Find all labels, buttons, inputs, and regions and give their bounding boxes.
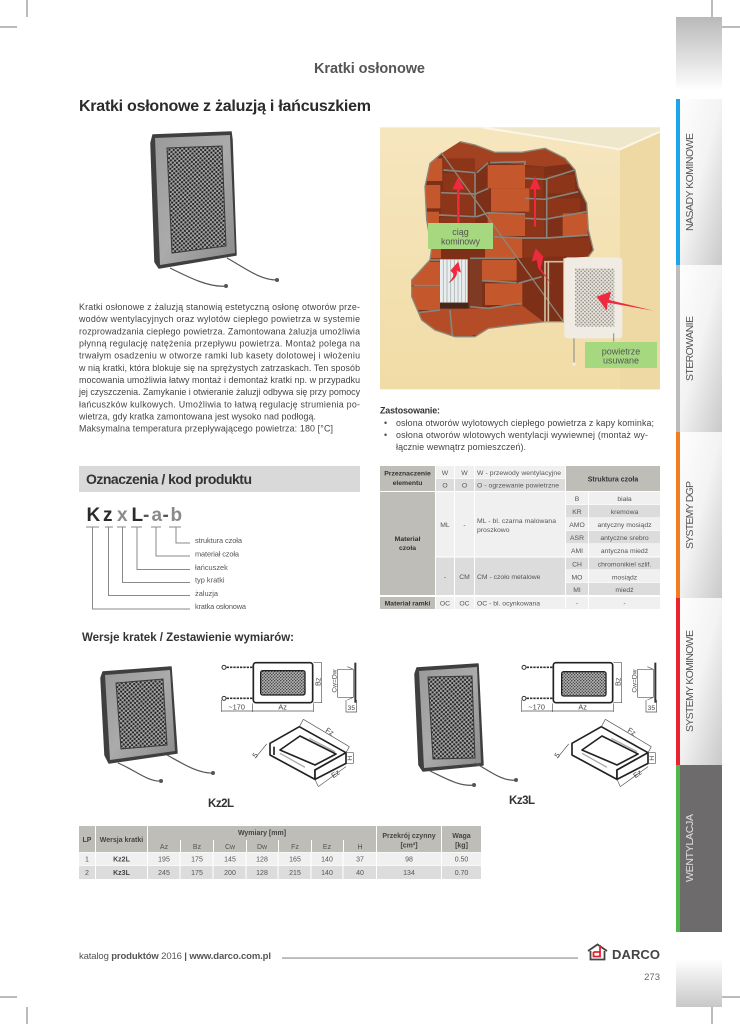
table: materials and finishes: Materiał ramki	[385, 600, 430, 608]
table: dimensions: 128	[256, 870, 268, 877]
heading: product code: Oznaczenia / kod produktu	[86, 471, 252, 487]
table: materials and finishes: chromonikiel szlif.	[598, 562, 651, 568]
table: dimensions: Wersja kratki	[100, 837, 143, 844]
table: dimensions: 134	[403, 870, 415, 877]
table: dimensions: Dw	[257, 844, 268, 851]
table: materials and finishes: elementu	[393, 480, 422, 487]
page number: 273	[644, 972, 660, 983]
description paragraph: w nią kratki, która blokuje się na sprężystych zatrzaskach. Ten sposób	[78, 363, 360, 373]
code labels	[195, 536, 247, 611]
application list: łącznie wewnątrz pomieszczeń).	[396, 442, 526, 452]
table: dimensions: 195	[158, 856, 170, 864]
technical drawing: Kz3L: Cw=Dw	[632, 669, 639, 693]
label: Kz2L: Kz2L	[208, 798, 234, 810]
application list: osłona otworów wlotowych wentylacji wywiewnej (montaż wy-	[396, 430, 648, 440]
description paragraph: rozprowadzania ciepłego powietrza. Zamontowana żaluzja umożliwia	[79, 326, 360, 336]
description paragraph: łańcuszków kulkowych. Umożliwia to łatwą regulację strumienia po-	[79, 399, 360, 409]
description paragraph: trwałym osadzeniu w otworze ramki lub kasety dolotowej i włożeniu	[79, 351, 360, 361]
code labels: typ kratki	[195, 576, 225, 584]
table: materials and finishes: mosiądz	[612, 574, 638, 582]
table: materials and finishes: Struktura czoła	[588, 476, 638, 484]
sidebar navigation	[676, 17, 722, 1007]
main heading: Kratki osłonowe z żaluzją i łańcuszkiem	[79, 98, 371, 115]
table: dimensions: 128	[256, 856, 268, 864]
table: materials and finishes: czoła	[399, 545, 416, 552]
table: dimensions: Przekrój czynny	[382, 833, 436, 840]
description paragraph: wietrza, gdy kratka zamontowana jest wysoko nad podłogą.	[78, 412, 316, 422]
description paragraph	[78, 302, 361, 434]
description paragraph: płynną regulację natężenia przepływu powietrza. Montaż polega na	[79, 338, 360, 348]
table: materials and finishes: antyczny mosiądz	[597, 522, 652, 529]
tab: systemy kominowe	[676, 598, 722, 765]
technical drawing: Kz3L: 35	[648, 705, 655, 712]
tab: nasady kominowe: NASADY KOMINOWE	[684, 133, 696, 231]
code letters: L	[132, 505, 144, 526]
code labels: kratka osłonowa	[195, 602, 247, 611]
technical drawing: Kz2L: Az	[278, 703, 287, 712]
technical drawing: Kz3L: Fz	[626, 726, 638, 738]
tab: wentylacja	[676, 765, 722, 932]
table: materials and finishes: OC	[440, 600, 450, 608]
tab: sterowanie	[676, 265, 722, 432]
table: dimensions: Waga	[452, 833, 471, 840]
table: materials and finishes: CH	[572, 562, 582, 568]
code letters: b	[170, 505, 182, 526]
table: materials and finishes: proszkowo	[477, 527, 510, 534]
callout: powietrze usuwane	[585, 342, 657, 368]
table: dimensions: Ez	[323, 844, 332, 851]
tab: nasady kominowe	[676, 99, 722, 265]
technical drawing: Kz2L: Ez	[329, 768, 342, 780]
table: materials and finishes: Przeznaczenie	[384, 470, 431, 478]
code letters: -	[143, 505, 149, 526]
table: materials and finishes: -	[444, 574, 446, 581]
table: dimensions: 175	[191, 870, 203, 877]
technical drawing: Kz3L: 5	[552, 751, 562, 759]
table: materials and finishes: ML - bl. czarna malowana	[477, 518, 556, 525]
tab: sterowanie: STEROWANIE	[684, 316, 696, 381]
tab: wentylacja: WENTYLACJA	[684, 814, 696, 882]
product photo: grille with chains	[151, 132, 279, 288]
table: dimensions: 2	[85, 870, 89, 877]
technical drawing: Kz3L: Az	[578, 703, 587, 712]
table: materials and finishes: W	[461, 470, 468, 477]
technical drawing: Kz3L	[522, 663, 657, 787]
logo: DARCO: DARCO	[612, 947, 660, 962]
table: dimensions: [kg]	[455, 842, 468, 850]
product photo: Kz2L	[101, 667, 215, 783]
technical drawing: Kz3L: ~170	[528, 703, 545, 712]
code labels: łańcuszek	[195, 563, 228, 572]
logo: DARCO	[588, 944, 660, 962]
table: materials and finishes: AMO	[569, 522, 585, 529]
table: materials and finishes: OC - bl. ocynkowana	[477, 600, 540, 608]
table: dimensions: H	[357, 844, 363, 851]
table: materials and finishes: kremowa	[611, 509, 639, 516]
table: dimensions: LP	[83, 837, 92, 844]
table: dimensions: Bz	[193, 844, 202, 851]
code labels: struktura czoła	[195, 536, 243, 545]
heading: product code	[79, 466, 360, 492]
callout: ciąg kominowy: kominowy	[441, 236, 480, 246]
code letters: a	[152, 505, 162, 526]
table: materials and finishes: W - przewody wentylacyjne	[477, 470, 561, 477]
description paragraph: jej czyszczenia. Zamykanie i otwieranie żaluzji odbywa się przy pomocy	[78, 387, 361, 397]
table: dimensions: 145	[224, 856, 236, 864]
table: dimensions: 1	[85, 856, 89, 864]
technical drawing: Kz3L: H	[649, 756, 656, 761]
application list: osłona otworów wylotowych ciepłego powietrza z kapy kominka;	[396, 418, 654, 428]
code letters: -	[162, 505, 169, 526]
table: materials and finishes: AMI	[571, 548, 583, 555]
table: dimensions: Wymiary [mm]	[238, 830, 286, 837]
table: materials and finishes: ASR	[570, 535, 584, 542]
technical drawing: Kz3L: Ez	[631, 768, 644, 780]
table: dimensions: 245	[158, 870, 170, 877]
table: materials and finishes: antyczna miedź	[601, 548, 649, 555]
description paragraph: wodów wentylacyjnych oraz wylotów ciepłego powietrza w systemie	[78, 314, 360, 324]
product photo: Kz3L	[415, 664, 518, 787]
tab: systemy dgp	[676, 432, 722, 598]
table: materials and finishes: O	[442, 482, 448, 490]
code labels: materiał czoła	[195, 550, 240, 558]
table: dimensions: 140	[321, 856, 333, 864]
table: materials and finishes: OC	[459, 600, 470, 608]
table: dimensions: 140	[321, 870, 333, 877]
page title: Kratki osłonowe	[314, 61, 425, 77]
technical drawing: Kz2L: 5	[250, 751, 260, 759]
callout: powietrze usuwane: usuwane	[603, 356, 639, 366]
table: dimensions: [cm²]	[400, 842, 418, 850]
application list: •	[384, 418, 387, 428]
table: materials and finishes: Materiał	[395, 536, 420, 543]
table: dimensions: 0.70	[455, 870, 468, 877]
callout: powietrze usuwane: powietrze	[602, 346, 640, 356]
tab: systemy kominowe: SYSTEMY KOMINOWE	[684, 630, 696, 732]
callout: ciąg kominowy: ciąg	[452, 227, 469, 237]
table: materials and finishes: CM	[459, 574, 470, 581]
technical drawing: Kz2L	[222, 663, 357, 787]
table: dimensions: 165	[289, 856, 301, 864]
table: dimensions: 200	[224, 870, 236, 877]
table: materials and finishes: biała	[617, 496, 632, 503]
table: materials and finishes: O - ogrzewanie powietrzne	[477, 482, 559, 490]
technical drawing: Kz2L: Cw=Dw	[332, 669, 339, 693]
technical drawing: Kz2L: H	[347, 756, 354, 761]
code letters: x	[117, 505, 128, 526]
code letters: K	[86, 505, 100, 526]
technical drawing: Kz2L: ~170	[228, 703, 245, 712]
table: materials and finishes: W	[442, 470, 449, 477]
table: materials and finishes: B	[575, 496, 580, 503]
table: dimensions: Az	[160, 844, 169, 851]
code labels: żaluzja	[195, 589, 219, 598]
table: materials and finishes: antyczne srebro	[600, 535, 649, 542]
panel: product code	[79, 466, 360, 611]
installation photo	[380, 127, 660, 389]
label: Kz3L: Kz3L	[509, 795, 535, 807]
technical drawing: Kz2L: Bz	[313, 677, 322, 686]
table: materials and finishes: ML	[440, 522, 450, 529]
table: dimensions: Kz2L	[113, 856, 131, 864]
table: materials and finishes: -	[576, 600, 578, 608]
table: dimensions: 98	[405, 856, 413, 864]
description paragraph: Kratki osłonowe z żaluzją stanowią estetyczną osłonę otworów prze-	[79, 302, 360, 312]
table: dimensions: 40	[356, 870, 364, 877]
callout: ciąg kominowy	[428, 223, 493, 249]
code leader lines	[86, 527, 190, 609]
table: materials and finishes: KR	[572, 509, 582, 516]
table: materials and finishes: -	[623, 600, 626, 608]
table: materials and finishes: MI	[573, 587, 581, 594]
table: dimensions: 37	[356, 856, 364, 864]
table: dimensions: Fz	[291, 844, 299, 851]
application list	[380, 406, 654, 452]
table: dimensions: Kz3L	[113, 870, 131, 877]
description paragraph: mocowania umożliwia łatwy montaż i demontaż kratki np. w przypadku	[79, 375, 360, 385]
table: materials and finishes: -	[463, 522, 466, 529]
description paragraph: Maksymalna temperatura przepływającego powietrza: 180 [°C]	[79, 424, 333, 434]
table: dimensions: 215	[289, 870, 301, 877]
footer text: katalog produktów 2016 | www.darco.com.pl	[79, 951, 271, 962]
table: materials and finishes: CM - czoło metalowe	[477, 574, 541, 581]
technical drawing: Kz3L: Bz	[613, 677, 622, 686]
table: dimensions: 0.50	[455, 856, 468, 864]
table: materials and finishes	[380, 466, 660, 609]
table: materials and finishes: MO	[572, 574, 582, 582]
section heading: versions: Wersje kratek / Zestawienie wymiarów:	[82, 632, 294, 644]
table: dimensions	[79, 826, 481, 879]
table: dimensions: 175	[191, 856, 203, 864]
tab: systemy dgp: SYSTEMY DGP	[684, 481, 696, 549]
table: dimensions: Cw	[225, 844, 236, 851]
table: materials and finishes: O	[462, 482, 467, 490]
table: materials and finishes: miedź	[615, 587, 634, 594]
application list: Zastosowanie:	[380, 406, 440, 416]
code letters: z	[103, 505, 112, 526]
technical drawing: Kz2L: Fz	[324, 726, 336, 738]
application list: •	[384, 430, 387, 440]
technical drawing: Kz2L: 35	[348, 705, 355, 712]
